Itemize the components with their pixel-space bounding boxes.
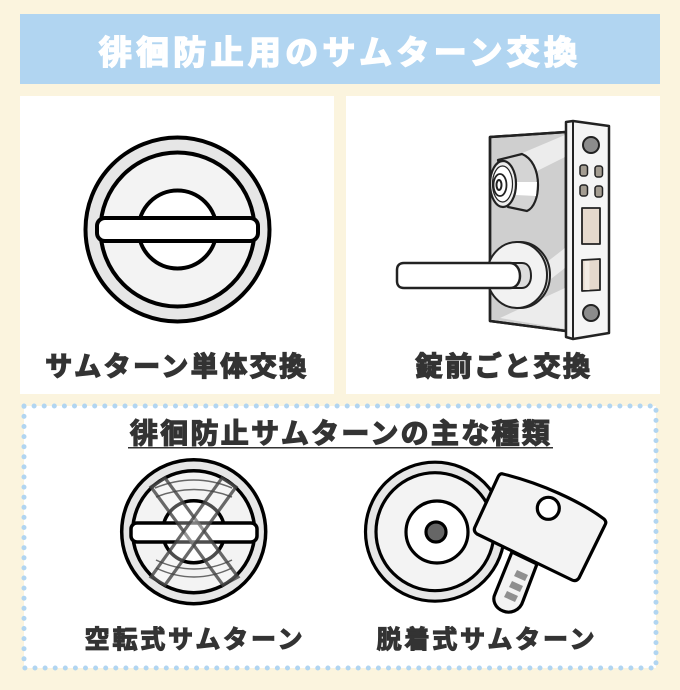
title banner: 徘徊防止用のサムターン交換 <box>99 34 581 71</box>
panel: thumb-turn replacement <box>20 96 334 394</box>
key cylinder <box>490 154 538 211</box>
label: thumb-turn only: サムターン単体交換 <box>45 352 309 382</box>
crossed-out mark <box>151 478 238 585</box>
door lever <box>397 242 550 308</box>
subheading: 徘徊防止サムターンの主な種類 <box>130 418 552 449</box>
icon: idle-turn thumb turn <box>122 460 266 604</box>
strike plate <box>566 121 609 339</box>
panel: types of anti-wandering thumb turns <box>24 406 656 668</box>
key <box>474 474 606 612</box>
icon: thumb turn <box>86 138 270 322</box>
icon: mortise lock <box>397 121 609 339</box>
lock body <box>490 132 566 331</box>
title banner <box>20 14 660 84</box>
label: whole lock: 錠前ごと交換 <box>416 351 592 382</box>
label: idle-turn type: 空転式サムターン <box>85 626 305 654</box>
label: removable type: 脱着式サムターン <box>377 626 597 654</box>
panel: whole lock replacement <box>346 96 660 394</box>
icon: removable thumb turn <box>366 462 606 612</box>
